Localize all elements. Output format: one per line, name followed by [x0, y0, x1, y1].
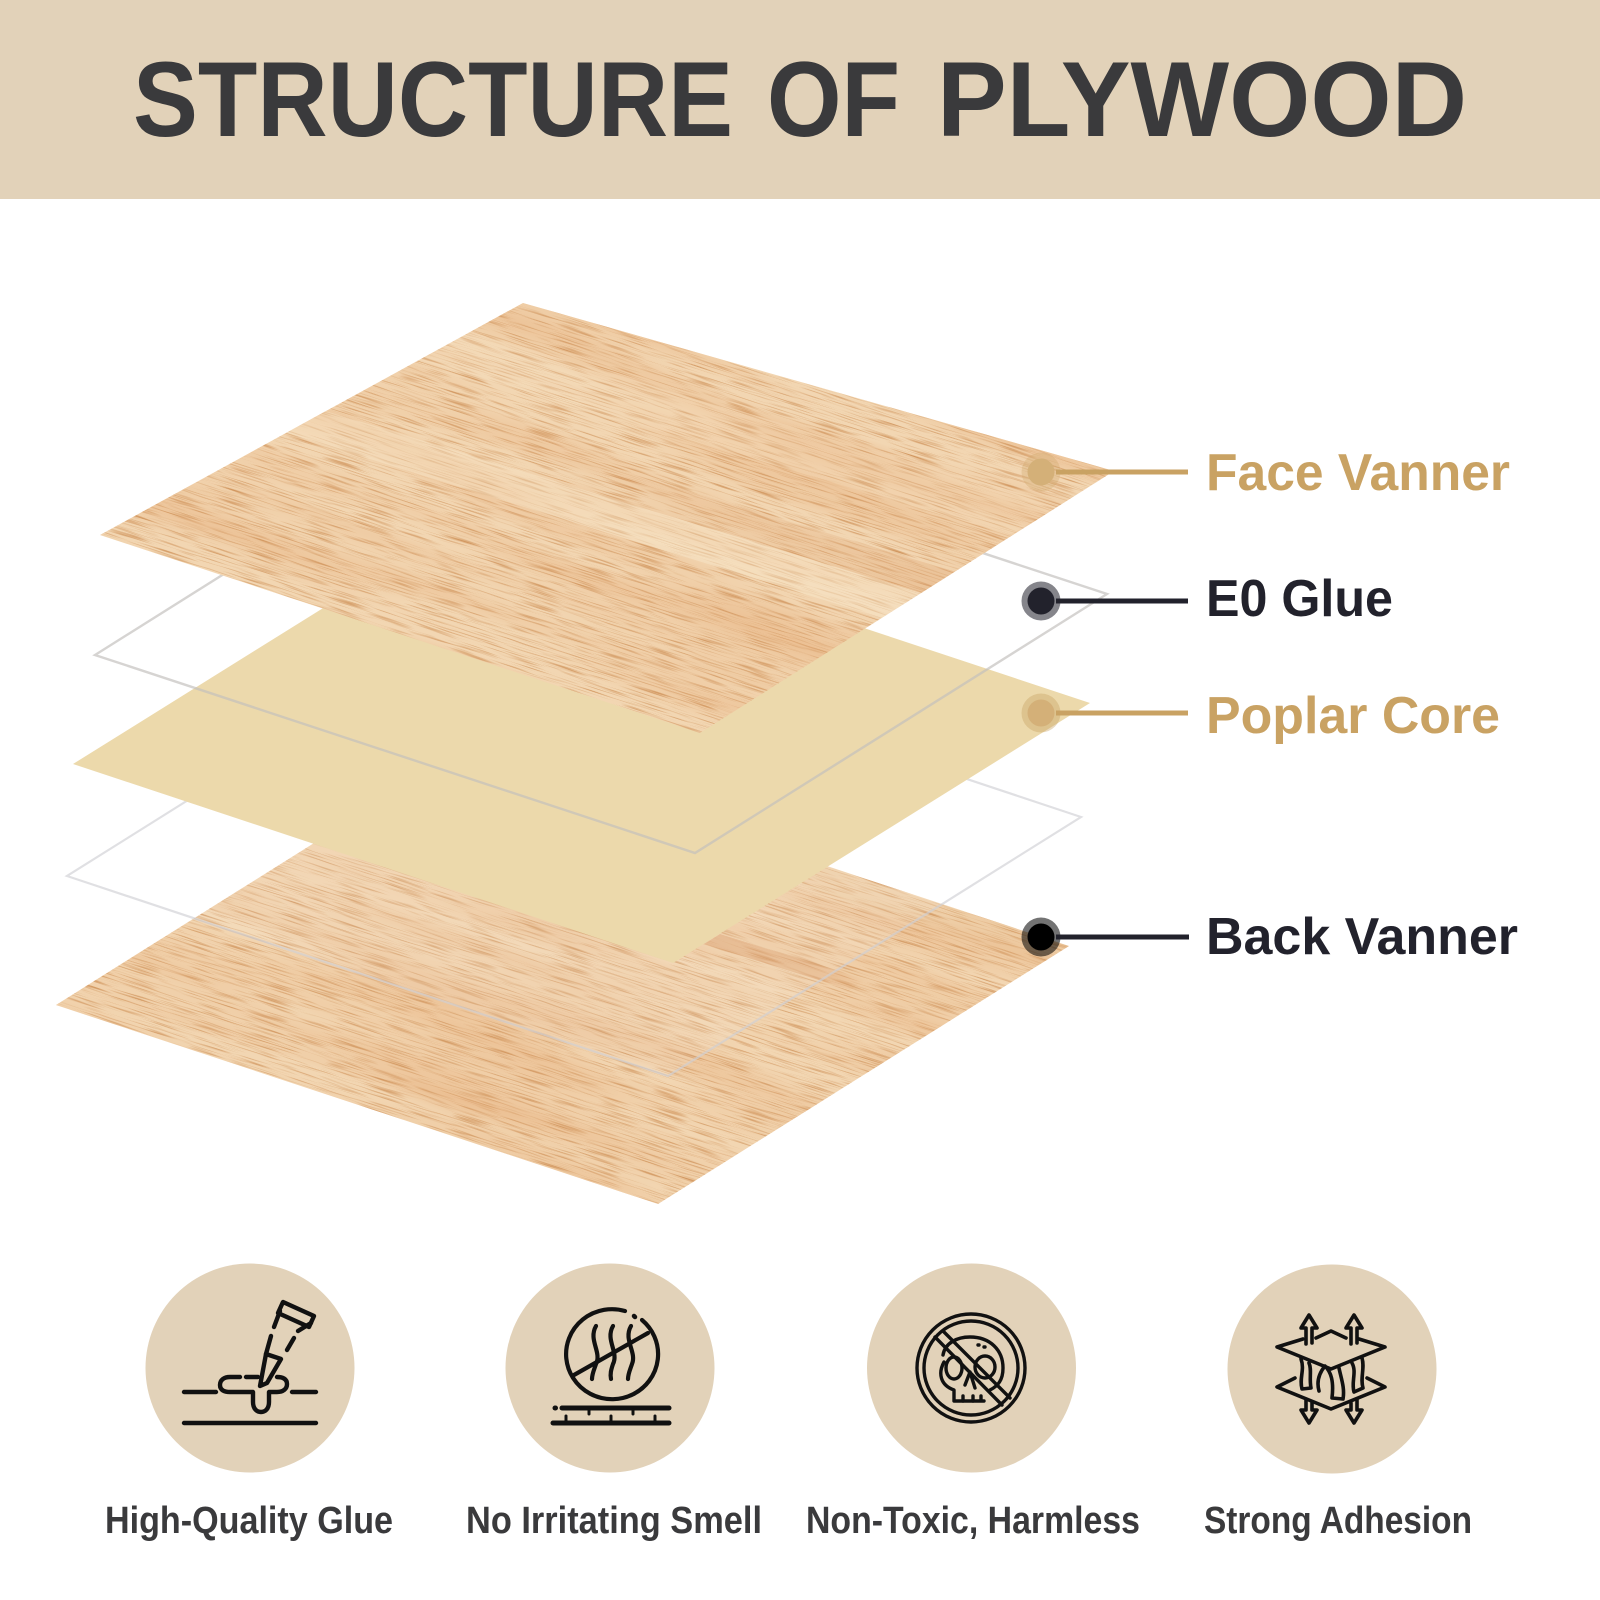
callout: Poplar Core	[1022, 687, 1500, 745]
feature: No Irritating Smell	[466, 1264, 762, 1542]
title: STRUCTURE	[133, 39, 733, 159]
feature: Non-Toxic, Harmless	[806, 1264, 1140, 1542]
callout: Back Vanner: Back Vanner	[1206, 908, 1518, 966]
back veneer sheet	[56, 844, 1069, 1204]
callout: E0 Glue	[1022, 570, 1393, 628]
icon: glue tube	[184, 1302, 316, 1423]
callout: Face Vanner: Face Vanner	[1206, 444, 1510, 502]
label: No Irritating Smell	[466, 1500, 762, 1542]
face veneer sheet	[100, 303, 1108, 733]
poplar core sheet	[73, 504, 1090, 963]
label: High-Quality Glue	[105, 1500, 393, 1542]
feature: Strong Adhesion	[1204, 1264, 1472, 1542]
icon: no skull	[917, 1314, 1025, 1422]
callout: Face Vanner	[1022, 444, 1510, 502]
callout: Poplar Core: Poplar Core	[1206, 687, 1500, 745]
header band	[0, 0, 1600, 199]
lower glue film	[67, 617, 1081, 1076]
feature: High-Quality Glue	[105, 1264, 393, 1542]
label: Strong Adhesion	[1204, 1500, 1472, 1542]
title	[133, 39, 1467, 159]
callout: E0 Glue: E0 Glue	[1206, 570, 1393, 628]
title: OF	[767, 39, 900, 159]
icon: no smell	[553, 1309, 669, 1423]
icon: strong adhesion	[1277, 1315, 1385, 1423]
exploded plywood layers diagram	[56, 303, 1110, 1204]
label: Non-Toxic, Harmless	[806, 1500, 1140, 1542]
title: PLYWOOD	[937, 39, 1467, 159]
upper glue film	[95, 396, 1107, 853]
callout: Back Vanner	[1022, 908, 1518, 966]
